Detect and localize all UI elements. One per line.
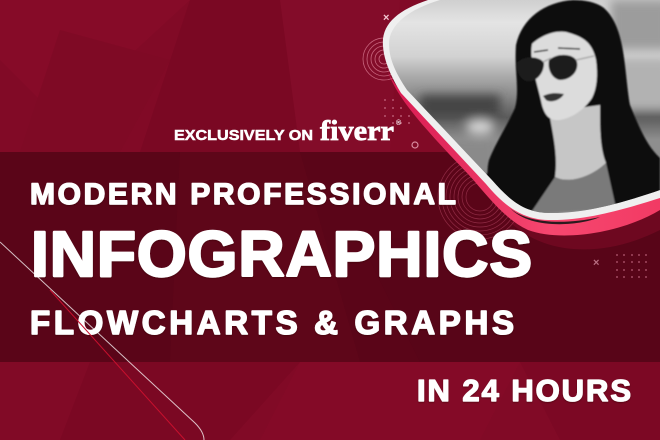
blurred horizon details	[420, 0, 660, 180]
heading: in 24 hours: IN 24 HOURS	[417, 373, 631, 408]
neck and chest	[549, 105, 606, 180]
dark shadow under ribbon	[500, 200, 660, 248]
dots grid upper	[384, 99, 410, 124]
shirt	[530, 163, 616, 214]
dark edge under frame	[510, 208, 600, 224]
lips	[543, 93, 564, 101]
heading: flowcharts and graphs: FLOWCHARTS & GRAPHS	[30, 304, 514, 341]
icon: x mark lower: ×	[593, 257, 599, 269]
decorative red line	[50, 290, 185, 440]
heading: infographics: INFOGRAPHICS	[31, 218, 532, 290]
exclusively label: EXCLUSIVELY ON	[174, 128, 313, 144]
hair strands left	[486, 172, 489, 176]
concentric rings upper	[363, 38, 405, 80]
photo	[380, 0, 660, 225]
pink ribbon	[388, 72, 660, 236]
registered mark: ®	[396, 119, 402, 127]
photo background	[380, 0, 660, 225]
small ring	[412, 142, 418, 148]
decorative white line	[0, 242, 204, 440]
hair	[488, 0, 660, 211]
heading: modern professional: MODERN PROFESSIONAL	[30, 178, 456, 211]
icon: x mark top: ×	[383, 12, 389, 24]
brows	[534, 48, 580, 52]
face	[531, 32, 597, 120]
exclusively on fiverr logo	[174, 116, 402, 147]
white photo frame	[383, 0, 660, 220]
sunglasses	[517, 55, 594, 81]
concentric rings lower	[438, 155, 522, 239]
dots grid lower	[616, 254, 647, 278]
woman	[486, 0, 660, 214]
dark title band	[0, 152, 660, 362]
shadow under ribbon over band	[510, 205, 660, 249]
fiverr wordmark: fiverr	[320, 116, 394, 147]
